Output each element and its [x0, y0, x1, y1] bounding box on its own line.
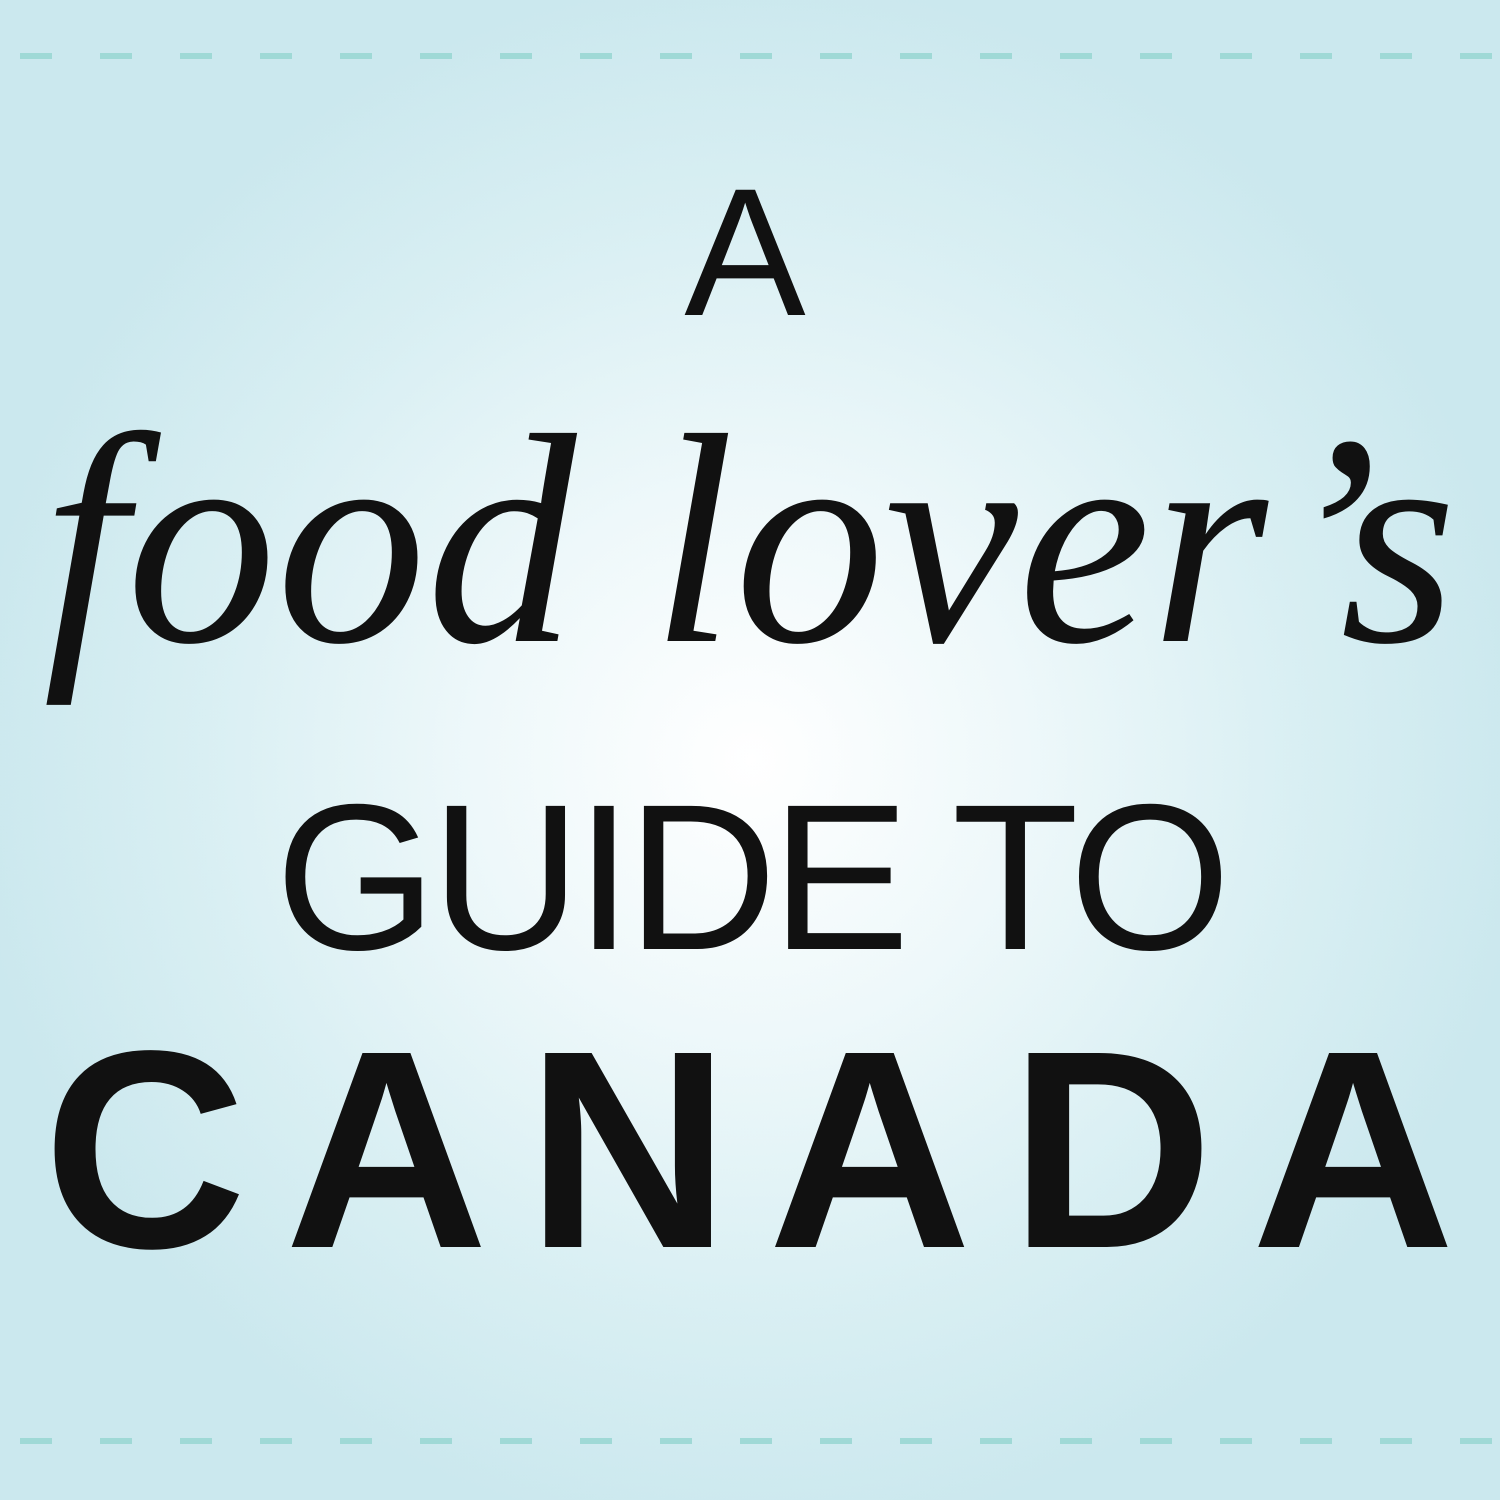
title: CANADA: CANADA [43, 992, 1493, 1307]
title: A: A [684, 150, 806, 354]
title: food lover's script: food lover’s [43, 374, 1457, 706]
title: GUIDE TO: GUIDE TO [275, 762, 1225, 994]
